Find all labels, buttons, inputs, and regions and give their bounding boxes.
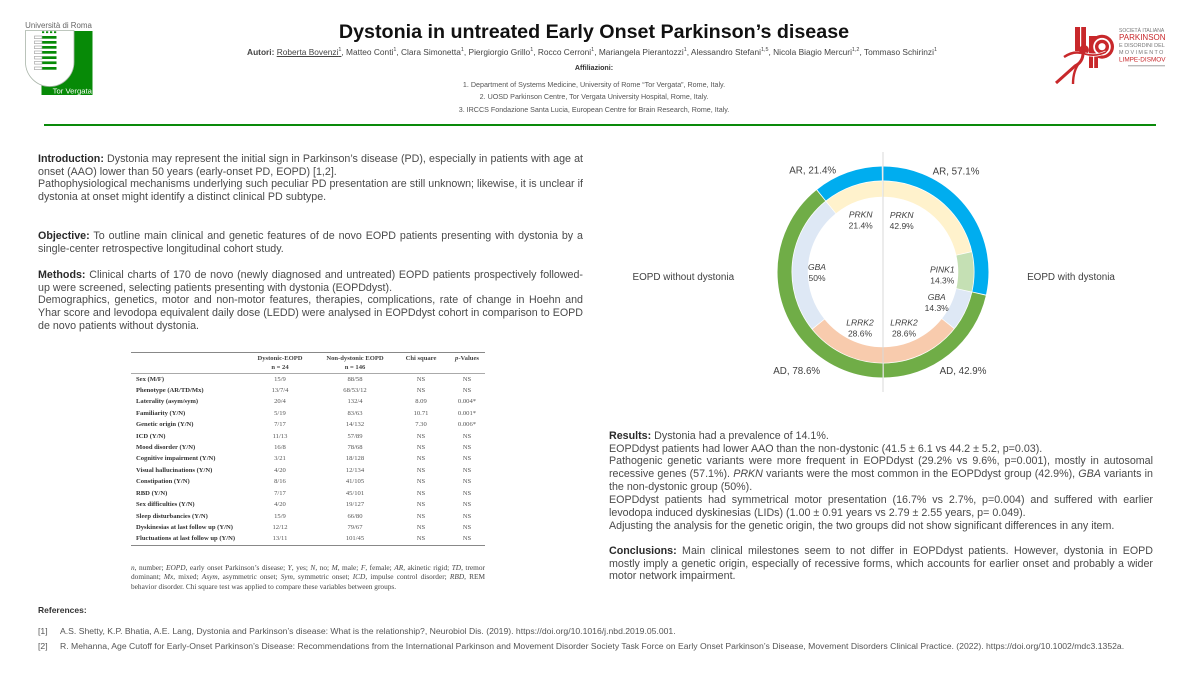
reference 1: A.S. Shetty, K.P. Bhatia, A.E. Lang, Dystonia and Parkinson’s disease: What is the relationship?, Neurobiol Dis. (2019). https://doi.org/10.1016/j.nbd.2019.05.001. bbox=[60, 626, 676, 636]
table: clinical comparison: NS bbox=[463, 433, 471, 440]
table: clinical comparison: 13/11 bbox=[273, 535, 287, 542]
text block: results: EOPDdyst patients had symmetrical motor presentation (16.7% vs 2.7%, p=0.004) and suffered with earlier levodopa induced dyskinesias (LIDs) (1.00 ± 0.91 years vs 2.79 ± 2.55 years, p= 0.049). bbox=[609, 494, 1153, 519]
reference 1: [1] bbox=[38, 626, 48, 636]
logo: Università di Roma Tor Vergata: Tor Vergata bbox=[53, 86, 93, 96]
table: clinical comparison: NS bbox=[417, 467, 425, 474]
table: clinical comparison: 88/58 bbox=[347, 376, 363, 382]
table: clinical comparison: NS bbox=[417, 478, 425, 485]
outer labels: AR, 21.4% bbox=[789, 166, 836, 176]
table: clinical comparison: NS bbox=[463, 535, 471, 542]
table: clinical comparison: NS bbox=[417, 433, 425, 440]
text block: introduction: Introduction: Dystonia may represent the initial sign in Parkinson’s disease (PD), especially in patients with age at onset (AAO) lower than 50 years (early-onset PD, EOPD) [1,2]. bbox=[38, 153, 583, 178]
table: clinical comparison: p-Values bbox=[455, 355, 479, 362]
table: clinical comparison: 132/4 bbox=[347, 398, 363, 405]
table: clinical comparison: Constipation (Y/N) bbox=[136, 478, 190, 485]
chart: genetic variants double donut: AR, 57.1% bbox=[933, 166, 980, 178]
table: clinical comparison: 10.71 bbox=[414, 410, 428, 417]
chart: genetic variants double donut: 14.3% bbox=[925, 303, 949, 313]
text block: methods: Demographics, genetics, motor and non-motor features, therapies, complications, rate of change in Hoehn and Yhar score and levodopa equivalent daily dose (LEDD) were analysed in EOPDdyst cohort in comparison to EOPD de novo patients without dystonia. bbox=[38, 294, 583, 332]
table: clinical comparison: 8.09 bbox=[415, 398, 427, 405]
chart: genetic variants double donut: 14.3% bbox=[930, 276, 955, 286]
chart: genetic variants double donut: AD, 78.6% bbox=[773, 366, 820, 377]
text block: conclusions: Conclusions: Main clinical milestones seem to not differ in EOPDdyst patients. However, dystonia in EOPD mostly imply a genetic origin, especially of recessive forms, which accounts for earlier onset and probably a wider motor network impairment. bbox=[609, 545, 1153, 582]
table: clinical comparison: NS bbox=[417, 535, 425, 542]
table: clinical comparison: 16/8 bbox=[274, 444, 286, 451]
table: clinical comparison: NS bbox=[417, 524, 425, 531]
table: clinical comparison: 7/17 bbox=[274, 421, 286, 428]
table: clinical comparison: 79/67 bbox=[347, 524, 363, 531]
table footnote: n, number; EOPD, early onset Parkinson’s disease; Y, yes; N, no; M, male; F, female; AR, akinetic rigid; TD, tremor dominant; Mx, mixed; Asym, asymmetric onset; Sym, symmetric onset; ICD, impulse control disorder; RBD, REM behavior disorder. Chi square test was applied to compare these variables between groups. bbox=[131, 562, 485, 591]
table: clinical comparison: 3/21 bbox=[274, 455, 286, 462]
chart: genetic variants double donut: LRRK2 bbox=[890, 318, 918, 328]
table: clinical comparison: 19/127 bbox=[346, 501, 364, 508]
text block: introduction: Pathophysiological mechanisms underlying such peculiar PD presentation are still unknown; likewise, it is unclear if dystonia at onset might identify a distinct clinical PD subtype. bbox=[38, 178, 583, 203]
table: clinical comparison: 101/45 bbox=[346, 535, 364, 542]
table: clinical comparison: 12/12 bbox=[272, 524, 288, 531]
chart: genetic variants double donut: LRRK2 bbox=[846, 318, 874, 328]
logo: LIMPE-DISMOV society: LIMPE-DISMOV bbox=[1119, 56, 1166, 64]
table: clinical comparison: NS bbox=[463, 501, 471, 508]
reference 2: [2] bbox=[38, 641, 48, 651]
table: clinical comparison: NS bbox=[417, 376, 425, 382]
chart: genetic variants double donut: AD, 42.9% bbox=[940, 366, 987, 377]
table: clinical comparison: Fluctuations at last follow up (Y/N) bbox=[136, 535, 235, 542]
chart: genetic variants double donut: GBA bbox=[808, 262, 826, 272]
table: clinical comparison: 8/16 bbox=[274, 478, 286, 485]
chart: genetic variants double donut bbox=[633, 152, 1115, 392]
chart: genetic variants double donut: PINK1 bbox=[930, 264, 955, 274]
center divider bbox=[882, 152, 884, 392]
table: clinical comparison: 83/63 bbox=[347, 410, 363, 417]
table: clinical comparison: Sleep disturbancies (Y/N) bbox=[136, 513, 208, 520]
table: clinical comparison: RBD (Y/N) bbox=[136, 490, 167, 497]
chart: genetic variants double donut: 28.6% bbox=[892, 329, 916, 339]
table: clinical comparison: 7.30 bbox=[415, 421, 427, 428]
text block: methods bbox=[38, 269, 583, 332]
table: clinical comparison: 12/134 bbox=[346, 467, 364, 474]
gene labels: PRKN bbox=[849, 210, 873, 220]
logo: Università di Roma Tor Vergata bbox=[25, 21, 93, 96]
table: clinical comparison: 66/80 bbox=[347, 513, 363, 520]
table: clinical comparison: NS bbox=[417, 513, 425, 520]
outer ring: inheritance bbox=[784, 174, 982, 370]
table: clinical comparison: 7/17 bbox=[274, 490, 286, 497]
chart: genetic variants double donut: 50% bbox=[808, 273, 826, 283]
table: clinical comparison: n = 146 bbox=[345, 364, 365, 371]
table: clinical comparison: Sex (M/F) bbox=[136, 376, 164, 382]
authors: Autori: Roberta Bovenzi1, Matteo Conti1, Clara Simonetta1, Piergiorgio Grillo1, Rocco Cerroni1, Mariangela Pierantozzi1, Alessandro Stefani1,5, Nicola Biagio Mercuri1,2, Tommaso Schirinzi1 bbox=[247, 47, 937, 57]
table: clinical comparison: 0.001* bbox=[458, 410, 476, 417]
affiliations list: 3. IRCCS Fondazione Santa Lucia, European Centre for Brain Research, Rome, Italy. bbox=[459, 106, 729, 114]
logo: Università di Roma Tor Vergata: Università di Roma bbox=[25, 21, 92, 30]
table: clinical comparison: 4/20 bbox=[274, 467, 286, 474]
text block: objective: Objective: To outline main clinical and genetic features of de novo EOPD patients presenting with dystonia by a single-center retrospective longitudinal cohort study. bbox=[38, 230, 583, 255]
table: clinical comparison: Dystonic-EOPD bbox=[257, 355, 303, 362]
text block: introduction bbox=[38, 153, 583, 203]
chart: genetic variants double donut: 21.4% bbox=[849, 220, 873, 230]
table: clinical comparison: NS bbox=[463, 387, 471, 394]
table: clinical comparison: Sex difficulties (Y/N) bbox=[136, 501, 195, 508]
table: clinical comparison: Chi square bbox=[406, 355, 436, 362]
affiliations list: 1. Department of Systems Medicine, University of Rome “Tor Vergata”, Rome, Italy. bbox=[463, 80, 725, 88]
logo: LIMPE-DISMOV society: E DISORDINI DEL bbox=[1119, 43, 1165, 49]
text block: methods: Methods: Clinical charts of 170 de novo (newly diagnosed and untreated) EOPD patients prospectively followed-up were screened, selecting patients presenting with dystonia (EOPDdyst). bbox=[38, 269, 583, 294]
group labels: EOPD without dystonia bbox=[633, 272, 735, 283]
affiliations heading: Affiliazioni: bbox=[575, 64, 613, 72]
chart: genetic variants double donut: PRKN bbox=[890, 210, 914, 220]
table: clinical comparison: 4/20 bbox=[274, 501, 286, 508]
table: clinical comparison: 68/53/12 bbox=[343, 387, 367, 394]
title: Dystonia in untreated Early Onset Parkinson’s disease bbox=[339, 21, 849, 43]
chart: genetic variants double donut: GBA bbox=[928, 292, 946, 302]
table: clinical comparison: NS bbox=[463, 513, 471, 520]
table: clinical comparison bbox=[131, 352, 485, 546]
table: clinical comparison: NS bbox=[463, 490, 471, 497]
table: clinical comparison: Familiarity (Y/N) bbox=[136, 410, 185, 417]
table: clinical comparison: NS bbox=[463, 478, 471, 485]
chart: genetic variants double donut: 28.6% bbox=[848, 329, 872, 339]
header divider bbox=[44, 124, 1156, 126]
table: clinical comparison: Cognitive impairment (Y/N) bbox=[136, 455, 215, 462]
table: clinical comparison: 45/101 bbox=[346, 490, 364, 497]
table: clinical comparison: 15/9 bbox=[274, 376, 286, 382]
references heading: References: bbox=[38, 605, 87, 615]
table: clinical comparison: Mood disorder (Y/N) bbox=[136, 444, 195, 451]
inner ring: genes bbox=[800, 189, 966, 355]
text block: results: EOPDdyst patients had lower AAO than the non-dystonic (41.5 ± 6.1 vs 44.2 ± 5.2, p=0.03). bbox=[609, 443, 1042, 455]
table: clinical comparison: NS bbox=[463, 524, 471, 531]
table: clinical comparison: 0.004* bbox=[458, 398, 476, 405]
table: clinical comparison: NS bbox=[417, 490, 425, 497]
table: clinical comparison: NS bbox=[417, 444, 425, 451]
table: clinical comparison: n = 24 bbox=[271, 364, 289, 371]
table: clinical comparison: 14/132 bbox=[346, 421, 364, 428]
table: clinical comparison: ICD (Y/N) bbox=[136, 433, 166, 440]
table: clinical comparison: Visual hallucinations (Y/N) bbox=[136, 467, 212, 474]
table: clinical comparison: 78/68 bbox=[347, 444, 363, 451]
chart: genetic variants double donut: EOPD with dystonia bbox=[1027, 272, 1115, 283]
table: clinical comparison: NS bbox=[463, 467, 471, 474]
affiliations list: 2. UOSD Parkinson Centre, Tor Vergata University Hospital, Rome, Italy. bbox=[480, 93, 708, 101]
table: clinical comparison: Phenotype (AR/TD/Mx) bbox=[136, 387, 204, 394]
logo: LIMPE-DISMOV society bbox=[1055, 27, 1166, 84]
table: clinical comparison: 11/13 bbox=[273, 433, 287, 440]
table: clinical comparison: 20/4 bbox=[274, 398, 286, 405]
table: clinical comparison: NS bbox=[417, 455, 425, 462]
chart: genetic variants double donut: 42.9% bbox=[890, 221, 914, 231]
text block: results: Results: Dystonia had a prevalence of 14.1%. bbox=[609, 430, 829, 442]
table: clinical comparison: 13/7/4 bbox=[272, 387, 288, 394]
text block: results bbox=[609, 430, 1153, 532]
table: clinical comparison: 15/9 bbox=[274, 513, 286, 520]
table: clinical comparison: 5/19 bbox=[274, 410, 286, 417]
table: clinical comparison: NS bbox=[417, 387, 425, 394]
table: clinical comparison: NS bbox=[417, 501, 425, 508]
table: clinical comparison: 57/89 bbox=[347, 433, 363, 440]
logo: LIMPE-DISMOV society: PARKINSON bbox=[1119, 33, 1166, 42]
table: clinical comparison: 18/128 bbox=[346, 455, 364, 462]
text block: results: Pathogenic genetic variants were more frequent in EOPDdyst (29.2% vs 9.6%, p=0.001), mostly in autosomal recessive genes (57.1%). PRKN variants were the most common in the EOPDdyst group (42.9%), GBA variants in the non-dystonic group (50%). bbox=[609, 455, 1153, 493]
table: clinical comparison: NS bbox=[463, 376, 471, 382]
table: clinical comparison: NS bbox=[463, 455, 471, 462]
table: clinical comparison: NS bbox=[463, 444, 471, 451]
affiliations list bbox=[459, 80, 729, 114]
table: clinical comparison: Laterality (asym/sym) bbox=[136, 398, 198, 405]
table: clinical comparison: Dyskinesias at last follow up (Y/N) bbox=[136, 524, 233, 531]
reference 2: R. Mehanna, Age Cutoff for Early-Onset Parkinson’s Disease: Recommendations from the International Parkinson and Movement Disorder Society Task Force on Early Onset Parkinson’s Disease, Movement Disorders Clinical Practice. (2022). https://doi.org/10.1002/mdc3.1352a. bbox=[60, 641, 1124, 651]
text block: results: Adjusting the analysis for the genetic origin, the two groups did not show significant differences in any item. bbox=[609, 520, 1114, 532]
logo: LIMPE-DISMOV society: SOCIETÀ ITALIANA bbox=[1119, 27, 1165, 34]
table: clinical comparison: 0.006* bbox=[458, 421, 476, 428]
table: clinical comparison: 41/105 bbox=[346, 478, 364, 485]
table: clinical comparison: Non-dystonic EOPD bbox=[326, 355, 384, 362]
logo: LIMPE-DISMOV society: MOVIMENTO bbox=[1119, 50, 1165, 56]
table: clinical comparison: Genetic origin (Y/N) bbox=[136, 421, 194, 428]
